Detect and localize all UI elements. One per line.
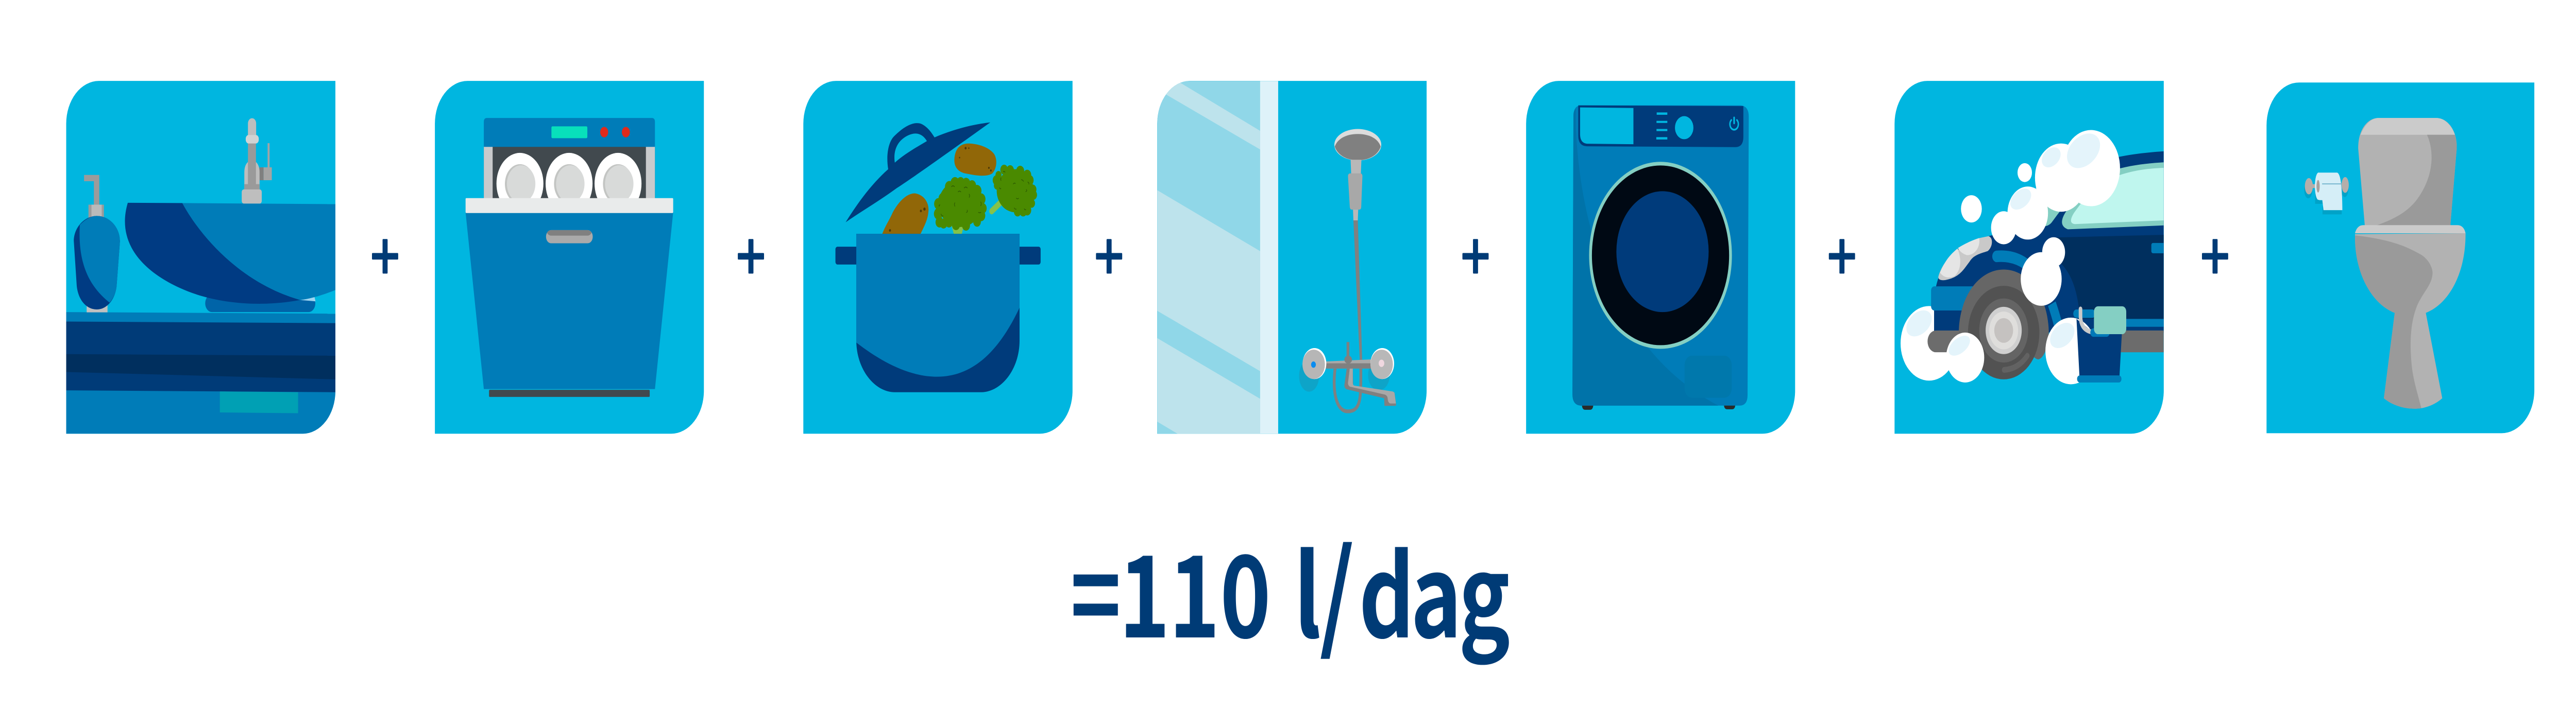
plus sign: +	[1094, 218, 1124, 293]
icon: glass shower door	[1157, 69, 1278, 435]
icon: bubble highlights	[1903, 127, 2105, 360]
icon: washing machine body	[1572, 106, 1749, 406]
icon: dishwasher interior with plates	[484, 146, 655, 214]
plus sign: +	[1827, 218, 1857, 293]
icon: pot body	[836, 234, 1041, 392]
icon: flying potato	[954, 144, 996, 176]
icon: car body	[1927, 151, 2165, 352]
icon: counter top	[66, 312, 335, 435]
icon: broccoli left	[934, 177, 987, 235]
panel: washing machine	[1526, 81, 1795, 434]
plus sign: +	[2200, 218, 2230, 293]
icon: control panel	[1578, 106, 1743, 147]
plus sign: +	[736, 218, 766, 293]
panel: cooking pot	[803, 81, 1073, 434]
total: =110 l/dag: =110	[1070, 507, 1290, 670]
icon: front wheel	[1959, 269, 2049, 379]
icon: potato in pot	[882, 194, 928, 235]
icon: shower mixer tap	[1299, 342, 1396, 411]
plus sign: +	[1461, 218, 1490, 293]
icon: faucet	[242, 118, 272, 203]
icon: bucket and sponge	[2073, 306, 2126, 383]
panel: car wash	[1894, 81, 2165, 434]
icon: soap dispenser	[74, 175, 120, 313]
panel: shower	[1157, 69, 1427, 435]
icon: washing machine feet	[1582, 404, 1735, 410]
total: =110 l/dag: /	[1319, 500, 1354, 671]
icon: sink bowl	[125, 203, 335, 312]
panel: toilet	[2266, 82, 2534, 433]
icon: washing machine door	[1589, 162, 1732, 349]
total: =110 l/dag: l	[1294, 507, 1321, 670]
total: =110 l/dag: dag	[1359, 507, 1510, 670]
icon: broccoli right	[992, 165, 1037, 216]
icon: toilet bowl	[2355, 225, 2466, 409]
icon: toilet paper roll	[2304, 172, 2349, 214]
icon: shower head and hose	[1334, 129, 1381, 361]
infographic: daily water use	[66, 81, 2535, 665]
panel: bathroom sink	[66, 81, 335, 435]
icon: foam bubbles	[1946, 130, 2120, 384]
icon: foam behind car	[1901, 306, 1958, 381]
icon: control panel	[484, 118, 655, 147]
icon: pot lid	[845, 123, 990, 222]
icon: toilet tank	[2358, 118, 2457, 226]
icon: dishwasher door	[466, 198, 673, 397]
panel: dishwasher	[435, 81, 704, 434]
plus sign: +	[370, 218, 400, 293]
